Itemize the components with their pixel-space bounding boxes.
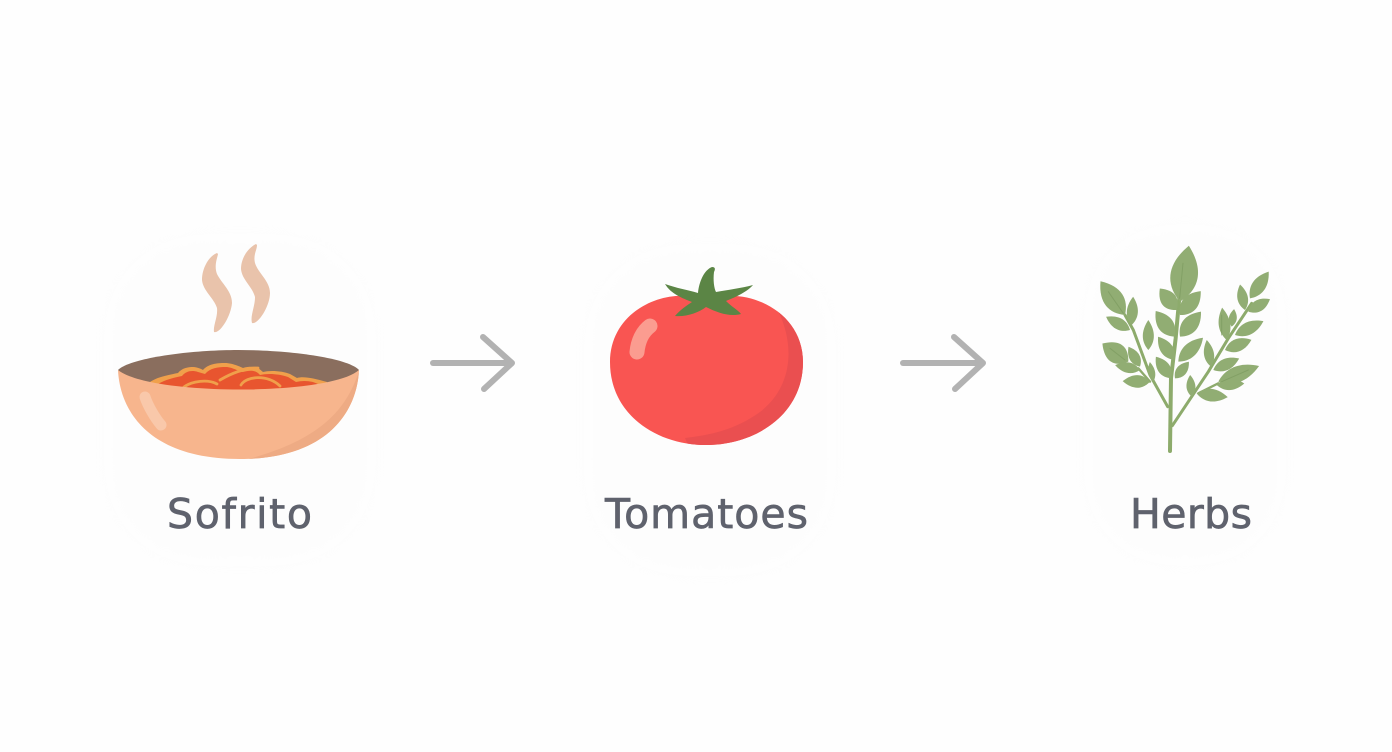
bowl shade	[249, 372, 359, 459]
tomato stem and calyx	[665, 267, 753, 316]
leaves	[1092, 244, 1274, 403]
stems	[1125, 263, 1252, 451]
arrow: sofrito to tomatoes	[433, 337, 512, 389]
arrow: tomatoes to herbs	[903, 337, 983, 389]
label: Herbs: Herbs	[1130, 490, 1252, 538]
label: Tomatoes: Tomatoes	[604, 490, 808, 538]
leaf veins	[1108, 263, 1248, 382]
icon: herbs	[1092, 244, 1274, 451]
icon: tomato	[610, 267, 815, 450]
tomato body	[610, 296, 803, 445]
icon: sofrito bowl with steam	[118, 244, 360, 465]
label: Sofrito: Sofrito	[167, 490, 312, 538]
icon: steam	[202, 244, 270, 332]
bowl interior	[118, 350, 359, 390]
bowl body	[118, 370, 359, 459]
bowl highlight	[145, 397, 161, 425]
tomato highlight	[637, 326, 650, 352]
sofrito food	[150, 363, 327, 395]
tomato shade	[685, 312, 803, 445]
